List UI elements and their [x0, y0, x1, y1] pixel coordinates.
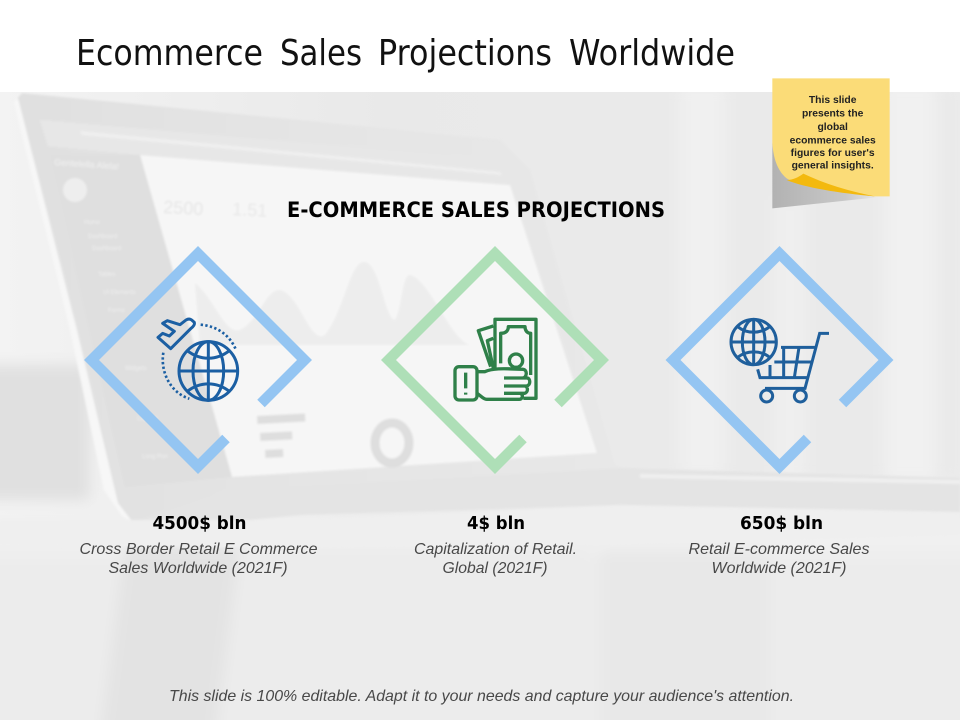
stat: capitalization [414, 513, 577, 577]
icon: money in hand [455, 319, 536, 400]
background: laptop photo: Layouts [137, 416, 158, 422]
background: laptop photo: Widgets [125, 366, 147, 372]
screen sidebar [50, 155, 232, 487]
background: laptop photo: Home [84, 220, 101, 226]
background: laptop photo: Forms [108, 308, 125, 314]
stat: capitalization: Capitalization of Retail. [414, 541, 577, 558]
title: Projections [378, 33, 552, 74]
title: Ecommerce [76, 33, 263, 74]
top white band [0, 0, 960, 92]
background: laptop photo: Long Run [142, 454, 168, 460]
icon: globe and cart [731, 319, 829, 402]
stat: cross border: Cross Border Retail E Commerce [80, 541, 318, 558]
laptop lid [16, 93, 640, 522]
background: laptop photo: Tables [98, 272, 115, 278]
note text: This slide [809, 95, 857, 106]
note text: presents the [802, 109, 864, 120]
stat: capitalization: 4$ bln [467, 513, 525, 534]
stat: cross border: 4500$ bln [152, 513, 246, 534]
stat: cross border: Sales Worldwide (2021F) [108, 560, 288, 577]
note text: ecommerce sales [790, 135, 876, 146]
lid edge highlight [14, 98, 132, 522]
stat: retail sales: Retail E-commerce Sales [688, 541, 870, 558]
laptop screen [140, 155, 597, 477]
note text [790, 95, 876, 171]
background: laptop photo: Dashboard [92, 246, 121, 252]
diamond frame: retail sales [673, 254, 886, 466]
keyboard [133, 468, 960, 530]
title [76, 33, 735, 74]
note fold [787, 174, 875, 196]
note paper [772, 78, 890, 196]
background: laptop photo: Gentelella Alela! [54, 157, 119, 172]
stat: retail sales: Worldwide (2021F) [712, 560, 846, 577]
stat: cross border [80, 513, 318, 577]
diamond frame: capitalization [388, 254, 602, 466]
heading: E-COMMERCE SALES PROJECTIONS [287, 198, 665, 222]
background: laptop photo: UI Elements [103, 290, 136, 296]
screen chart [195, 262, 470, 345]
screen header [40, 120, 508, 185]
note text: figures for user's [791, 148, 875, 159]
background: laptop photo: Dashboard [88, 234, 117, 240]
note text: general insights. [792, 160, 874, 171]
background: laptop photo: 2500 [163, 197, 204, 219]
background: laptop photo: 1.51 [232, 199, 268, 221]
icon: plane and globe [158, 319, 238, 400]
stat: capitalization: Global (2021F) [442, 560, 548, 577]
title: Worldwide [569, 33, 735, 74]
note shadow [772, 143, 877, 208]
footer note: This slide is 100% editable. Adapt it to your needs and capture your audience's attention. [169, 688, 794, 705]
sticky note [772, 78, 890, 208]
diamond frame: cross border [92, 254, 304, 466]
stat: retail sales [688, 513, 870, 577]
note text: global [817, 122, 848, 133]
stat: retail sales: 650$ bln [740, 513, 823, 534]
title: Sales [280, 33, 362, 74]
